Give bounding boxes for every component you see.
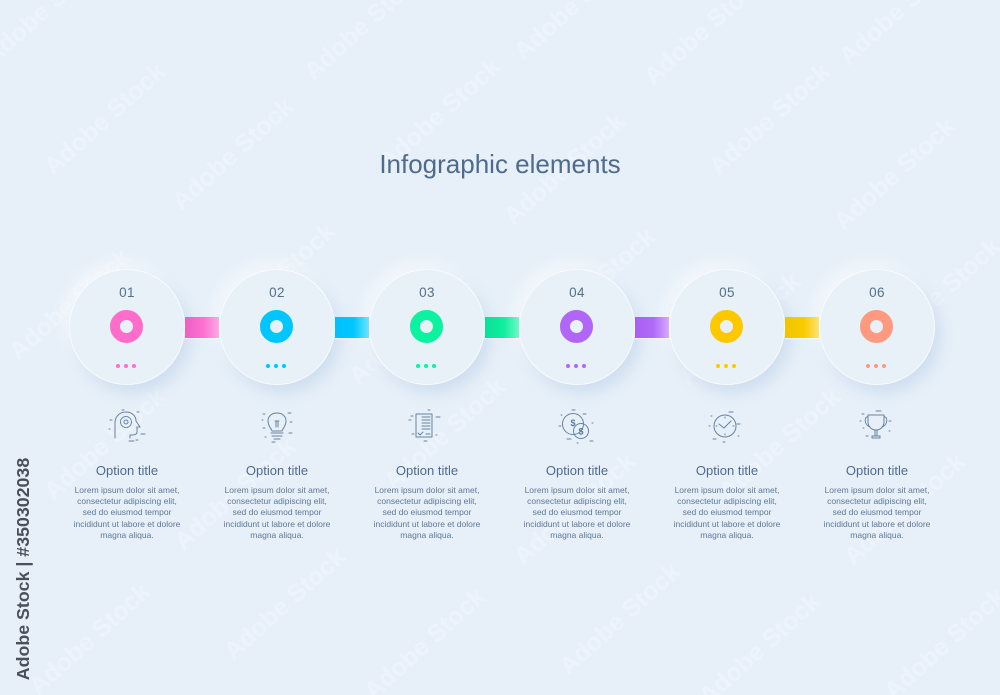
description 06: sed do eiusmod tempor bbox=[833, 507, 921, 517]
connector: blue bbox=[334, 317, 369, 338]
description 04 bbox=[524, 485, 630, 540]
watermark pattern: Adobe Stock bbox=[714, 382, 846, 506]
icon: dollar coins: $ bbox=[570, 418, 576, 428]
step circle 04 bbox=[519, 269, 635, 385]
watermark pattern: Adobe Stock bbox=[829, 112, 961, 236]
description 03: sed do eiusmod tempor bbox=[383, 507, 471, 517]
description 04: consectetur adipiscing elit, bbox=[527, 496, 627, 506]
description 06: Lorem ipsum dolor sit amet, bbox=[825, 485, 929, 495]
watermark pattern: Adobe Stock bbox=[344, 267, 476, 391]
step circle 04: 04 bbox=[569, 285, 585, 300]
description 03: incididunt ut labore et dolore bbox=[374, 519, 480, 529]
watermark pattern: Adobe Stock bbox=[209, 217, 341, 341]
description 03: consectetur adipiscing elit, bbox=[377, 496, 477, 506]
description 03 bbox=[374, 485, 480, 540]
title: Infographic elements bbox=[379, 149, 621, 179]
step circle 01 bbox=[69, 269, 185, 385]
watermark pattern: Adobe Stock bbox=[674, 267, 806, 391]
option title 05: Option title bbox=[696, 463, 758, 478]
description 01: magna aliqua. bbox=[100, 530, 154, 540]
watermark pattern: Adobe Stock bbox=[509, 447, 641, 571]
step circle 06 bbox=[819, 269, 935, 385]
description 01: incididunt ut labore et dolore bbox=[74, 519, 180, 529]
step circle 06: 06 bbox=[869, 285, 885, 300]
description 05: incididunt ut labore et dolore bbox=[674, 519, 780, 529]
description 04: Lorem ipsum dolor sit amet, bbox=[525, 485, 629, 495]
icon: dollar coins: $ bbox=[578, 426, 584, 436]
watermark pattern: Adobe Stock bbox=[39, 57, 171, 181]
step circle 05: 05 bbox=[719, 285, 735, 300]
description 02: sed do eiusmod tempor bbox=[233, 507, 321, 517]
icon: trophy bbox=[860, 410, 892, 438]
description 06: consectetur adipiscing elit, bbox=[827, 496, 927, 506]
watermark pattern: Adobe Stock bbox=[169, 432, 301, 556]
step circle 03: 03 bbox=[419, 285, 435, 300]
description 06: incididunt ut labore et dolore bbox=[824, 519, 930, 529]
icon: document with check bbox=[408, 410, 440, 442]
icon: head with gear bbox=[108, 410, 146, 442]
description 06 bbox=[824, 485, 930, 540]
description 04: magna aliqua. bbox=[550, 530, 604, 540]
connector: green bbox=[484, 317, 519, 338]
description 02 bbox=[224, 485, 330, 540]
icon: light bulb bbox=[262, 412, 292, 442]
description 05: magna aliqua. bbox=[700, 530, 754, 540]
description 06: magna aliqua. bbox=[850, 530, 904, 540]
watermark pattern: Adobe Stock bbox=[554, 557, 686, 681]
description 01 bbox=[74, 485, 180, 540]
watermark pattern: Adobe Stock bbox=[529, 222, 661, 346]
watermark pattern: Adobe Stock bbox=[704, 57, 836, 181]
watermark pattern: Adobe Stock bbox=[839, 447, 971, 571]
description 03: Lorem ipsum dolor sit amet, bbox=[375, 485, 479, 495]
step circle 03 bbox=[369, 269, 485, 385]
watermark pattern: Adobe Stock bbox=[4, 242, 136, 366]
watermark pattern: Adobe Stock bbox=[39, 382, 171, 506]
description 04: sed do eiusmod tempor bbox=[533, 507, 621, 517]
option title 01: Option title bbox=[96, 463, 158, 478]
description 05 bbox=[674, 485, 780, 540]
stock credit: Adobe Stock | #350302038 bbox=[13, 458, 33, 680]
connector: pink bbox=[184, 317, 219, 338]
description 01: Lorem ipsum dolor sit amet, bbox=[75, 485, 179, 495]
connector: purple bbox=[634, 317, 669, 338]
option title 04: Option title bbox=[546, 463, 608, 478]
icon: dollar coins bbox=[558, 410, 594, 444]
watermark pattern: Adobe Stock bbox=[219, 542, 351, 666]
description 02: magna aliqua. bbox=[250, 530, 304, 540]
option title 03: Option title bbox=[396, 463, 458, 478]
description 01: consectetur adipiscing elit, bbox=[77, 496, 177, 506]
watermark pattern: Adobe Stock bbox=[374, 52, 506, 176]
option title 06: Option title bbox=[846, 463, 908, 478]
description 03: magna aliqua. bbox=[400, 530, 454, 540]
description 02: incididunt ut labore et dolore bbox=[224, 519, 330, 529]
step circle 01: 01 bbox=[119, 285, 135, 300]
description 04: incididunt ut labore et dolore bbox=[524, 519, 630, 529]
watermark pattern: Adobe Stock bbox=[379, 372, 511, 496]
description 02: Lorem ipsum dolor sit amet, bbox=[225, 485, 329, 495]
watermark pattern: Adobe Stock bbox=[499, 107, 631, 231]
step circle 05 bbox=[669, 269, 785, 385]
step circle 02: 02 bbox=[269, 285, 285, 300]
description 05: sed do eiusmod tempor bbox=[683, 507, 771, 517]
option title 02: Option title bbox=[246, 463, 308, 478]
icon: clock bbox=[708, 412, 740, 442]
connector: yellow bbox=[784, 317, 819, 338]
description 05: Lorem ipsum dolor sit amet, bbox=[675, 485, 779, 495]
description 01: sed do eiusmod tempor bbox=[83, 507, 171, 517]
description 05: consectetur adipiscing elit, bbox=[677, 496, 777, 506]
watermark pattern: Adobe Stock bbox=[167, 92, 299, 216]
description 02: consectetur adipiscing elit, bbox=[227, 496, 327, 506]
step circle 02 bbox=[219, 269, 335, 385]
